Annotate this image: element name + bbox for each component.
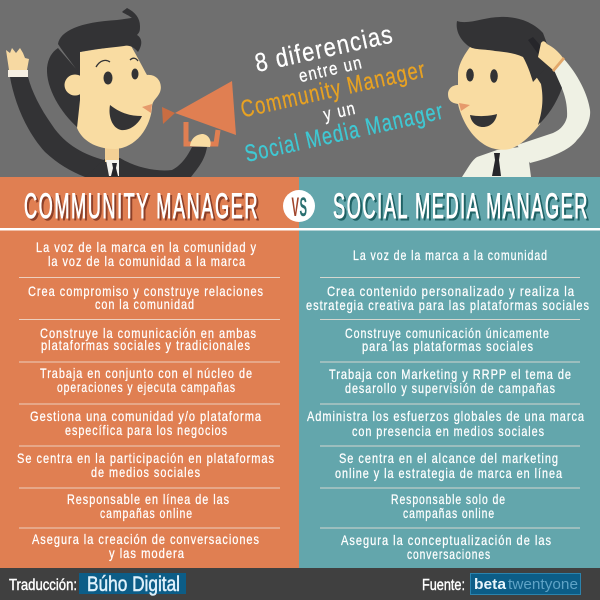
list: community manager points: Se centra en la participación en plataformas bbox=[17, 451, 275, 466]
title: entre un bbox=[297, 52, 365, 86]
credit: source: twentyone bbox=[508, 576, 578, 593]
list: community manager points: Trabaja en conjunto con el núcleo de bbox=[40, 366, 253, 381]
list: community manager points: de medios sociales bbox=[91, 465, 201, 480]
list: social media manager points: La voz de la marca a la comunidad bbox=[353, 248, 548, 263]
list: social media manager points: Responsable solo de bbox=[391, 492, 506, 507]
list: social media manager points: campañas online bbox=[403, 506, 495, 521]
credit: translation bbox=[9, 573, 186, 596]
list: social media manager points: conversaciones bbox=[407, 547, 491, 562]
heading: community manager bbox=[24, 187, 261, 228]
list: social media manager points: Asegura la conceptualización de las bbox=[341, 533, 552, 548]
title: Social Media Manager bbox=[242, 98, 446, 168]
list: community manager points: operaciones y ejecuta campañas bbox=[57, 380, 236, 395]
list: social media manager points: con presencia en medios sociales bbox=[352, 424, 545, 439]
list: community manager points: y las modera bbox=[109, 546, 185, 561]
title: 8 diferencias bbox=[252, 19, 396, 78]
list: community manager points: la voz de la comunidad a la marca bbox=[48, 254, 246, 269]
vs badge: V bbox=[292, 192, 299, 222]
list: community manager points: Construye la comunicación en ambas bbox=[40, 326, 257, 341]
credit: translation: Traducción: bbox=[9, 577, 77, 594]
list: community manager points: Crea compromiso y construye relaciones bbox=[28, 284, 264, 299]
list: social media manager points: Construye comunicación únicamente bbox=[345, 326, 550, 341]
panel: social media manager bbox=[299, 177, 600, 568]
panel: community manager bbox=[0, 177, 299, 568]
list: community manager points: específica para los negocios bbox=[65, 423, 228, 438]
heading: community manager: COMMUNITY MANAGER bbox=[24, 187, 259, 226]
list: community manager points: campañas online bbox=[100, 506, 193, 521]
list: community manager points: Gestiona una comunidad y/o plataforma bbox=[30, 409, 262, 424]
title: Community Manager bbox=[238, 56, 429, 123]
vs badge: S bbox=[300, 192, 307, 222]
list: community manager points: Responsable en línea de las bbox=[67, 492, 230, 507]
list: community manager points: La voz de la marca en la comunidad y bbox=[36, 240, 257, 255]
list: social media manager points: para las plataformas sociales bbox=[362, 339, 534, 354]
title: y un bbox=[321, 98, 358, 124]
credit: source: beta bbox=[474, 576, 507, 593]
list: community manager points: Asegura la creación de conversaciones bbox=[32, 532, 260, 547]
vs badge bbox=[283, 190, 315, 222]
footer bar bbox=[0, 568, 600, 600]
title bbox=[238, 19, 446, 168]
header background bbox=[0, 0, 600, 177]
list: social media manager points bbox=[306, 248, 590, 562]
credit: translation: Búho Digital bbox=[87, 573, 180, 596]
icon: man with megaphone bbox=[6, 8, 236, 177]
credit: source bbox=[422, 574, 580, 594]
list: community manager points: con la comunidad bbox=[95, 297, 195, 312]
icon: man scratching head bbox=[448, 17, 590, 177]
list: community manager points: plataformas sociales y tradicionales bbox=[41, 338, 251, 353]
heading: community manager: COMMUNITY MANAGER bbox=[26, 189, 261, 228]
credit: source: Fuente: bbox=[422, 577, 465, 594]
list: community manager points bbox=[17, 240, 280, 561]
